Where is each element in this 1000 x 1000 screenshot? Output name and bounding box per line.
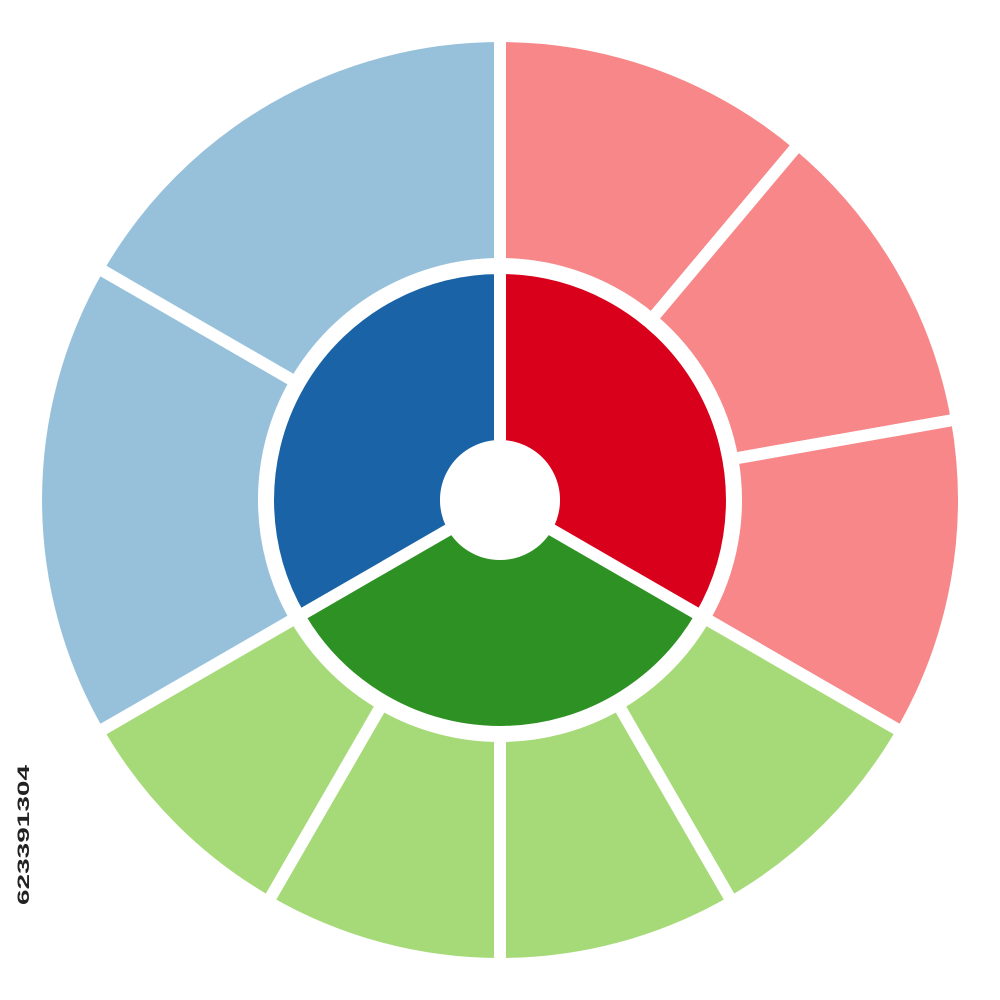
inner ring: green — [299, 527, 701, 732]
stock id text: 623391304 — [14, 764, 33, 905]
outer ring: blue segments — [36, 36, 500, 732]
inner ring: blue — [268, 268, 500, 616]
inner ring: red — [500, 268, 732, 616]
outer ring: green segments — [98, 618, 902, 964]
outer ring: red segments — [500, 36, 964, 732]
